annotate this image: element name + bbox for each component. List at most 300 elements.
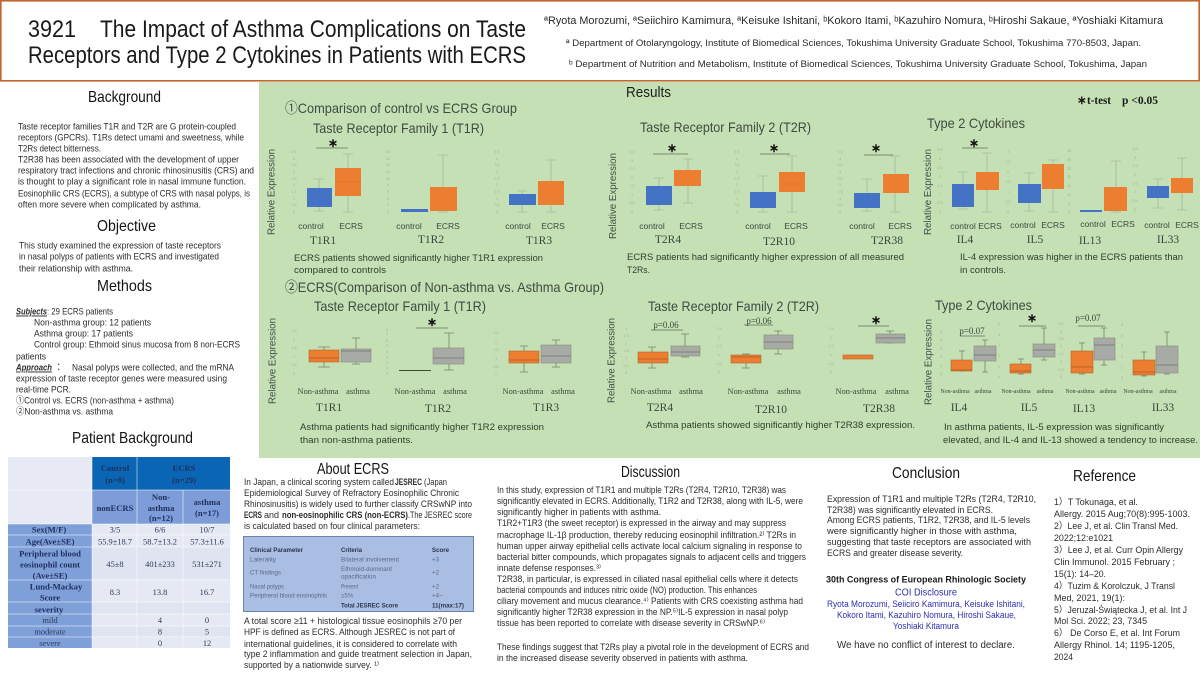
chart: T1R1 control vs ECRS: ∗ (328, 136, 338, 150)
table: JESREC score (244, 536, 474, 612)
text: reference list (1054, 496, 1190, 662)
chart: T1R2 non-asthma vs asthma: 5 (386, 344, 388, 348)
table: patient characteristics: 12 (203, 639, 211, 648)
panel: conclusion (826, 465, 1036, 651)
axis label: Relative Expression (606, 318, 618, 403)
chart: T1R3 control vs ECRS: 2.5 (494, 177, 500, 181)
table: patient characteristics: asthma (148, 503, 175, 513)
chart: IL33 non-asthma vs asthma (1121, 323, 1178, 414)
text: COI disclosure: Yoshiaki Kitamura (893, 621, 959, 631)
chart: T1R1 control vs ECRS: 1.5 (291, 190, 297, 194)
table: patient characteristics: Non- (152, 492, 170, 502)
panel: patient background (8, 430, 230, 648)
text: methods body (15, 306, 240, 416)
chart: T1R3 non-asthma vs asthma: 0 (495, 374, 497, 378)
text: ECRS definition: international guidelines, it is considered to correlate with (244, 638, 457, 649)
chart: IL4 non-asthma vs asthma: 2 (940, 355, 942, 359)
text: methods body: Approach (15, 362, 52, 372)
text: reference list: Med, 2021, 19(1): (1054, 592, 1125, 603)
heading: type 2 cytokines: Type 2 Cytokines (927, 115, 1025, 131)
chart: T2R10 control vs ECRS: 0 (736, 210, 738, 214)
chart: T2R38 non-asthma vs asthma: Non-asthma (836, 387, 877, 396)
chart: IL13 control vs ECRS: 5 (1068, 202, 1070, 206)
chart: IL13 non-asthma vs asthma: p=0.07 (1075, 313, 1101, 323)
table: patient characteristics: (n=29) (172, 475, 196, 485)
table: patient characteristics: 55.9±18.7 (98, 538, 132, 546)
chart: IL33 control vs ECRS: 3.5 (1132, 147, 1138, 151)
chart: IL4 control vs ECRS: ECRS (978, 221, 1002, 231)
table: patient characteristics: 10/7 (200, 526, 214, 534)
text: reference list: 2022;12:e1021 (1054, 532, 1113, 543)
table: patient characteristics: (n=17) (195, 508, 219, 518)
chart: T2R4 control vs ECRS: 0.5 (629, 201, 635, 205)
chart: T1R2 non-asthma vs asthma (386, 315, 467, 415)
chart: T2R38 control vs ECRS: 3 (839, 170, 841, 174)
chart: T1R2 non-asthma vs asthma: 1 (386, 366, 388, 370)
chart: IL5 control vs ECRS: control (1010, 220, 1036, 230)
table: patient characteristics: 0 (205, 616, 209, 625)
chart: T1R3 control vs ECRS: 1.5 (494, 190, 500, 194)
chart: T1R3 control vs ECRS: ECRS (541, 221, 565, 231)
chart: T1R1 non-asthma vs asthma (291, 329, 371, 414)
table: patient characteristics: 8.3 (110, 588, 120, 597)
chart: IL5 non-asthma vs asthma (998, 311, 1055, 414)
text: conclusion body: suggesting that taste receptors are associated with (827, 536, 1031, 547)
table: patient characteristics: mild (42, 616, 58, 625)
text: reference list: 15(1): 14–20. (1054, 568, 1106, 579)
chart: T1R2 control vs ECRS: 10 (386, 177, 390, 181)
table: JESREC score: +2 (432, 584, 440, 590)
chart: T2R10 non-asthma vs asthma: asthma (777, 387, 801, 396)
chart: IL13 control vs ECRS: 20 (1067, 175, 1071, 179)
panel: discussion (497, 464, 809, 663)
chart: T1R2 non-asthma vs asthma: T1R2 (425, 403, 451, 415)
title: 3921 (28, 16, 76, 43)
chart: T1R1 control vs ECRS: 3.5 (291, 163, 297, 167)
text: discussion body: T2R38, in particular, is expressed in ciliated nasal epithelial cells where it detects (497, 573, 798, 584)
chart: IL13 control vs ECRS: 25 (1067, 167, 1071, 171)
text: discussion body (497, 484, 809, 663)
caption: cytokines asthma: elevated, and IL-4 and IL-13 showed a tendency to increase. (943, 435, 1198, 446)
panel: references (1054, 468, 1190, 662)
table: JESREC score: Score (432, 547, 449, 554)
text: JESREC introduction: In Japan, a clinical scoring system called (244, 476, 394, 487)
chart: T1R2 control vs ECRS: T1R2 (418, 234, 444, 246)
chart: IL5 control vs ECRS: 1.5 (1005, 180, 1011, 184)
chart: T2R38 control vs ECRS: 4 (839, 157, 841, 161)
table: patient characteristics: Peripheral blood (19, 548, 81, 558)
table: patient characteristics: (Ave±SE) (33, 570, 67, 580)
chart: T2R4 control vs ECRS: T2R4 (655, 234, 681, 246)
chart: IL5 non-asthma vs asthma: 2 (998, 354, 1000, 358)
chart: IL5 control vs ECRS (1005, 150, 1065, 246)
table: JESREC score: +4~ (432, 592, 443, 600)
text: methods body: real-time PCR. (16, 384, 71, 394)
chart: T1R2 non-asthma vs asthma: asthma (443, 387, 467, 396)
chart: T1R1 non-asthma vs asthma: asthma (346, 387, 370, 396)
text: JESREC introduction: JESREC (395, 476, 422, 487)
chart: IL33 control vs ECRS: IL33 (1157, 234, 1179, 246)
text: discussion body: tissue has been reported to correlate with disease severity in CRSwNP.⁶⁾ (497, 617, 765, 628)
chart: T1R3 control vs ECRS: 2 (496, 183, 498, 187)
table: patient characteristics: 4 (158, 616, 163, 625)
chart: T2R38 non-asthma vs asthma: 0 (830, 370, 832, 374)
chart: T2R38 control vs ECRS: T2R38 (871, 235, 903, 247)
chart: IL13 non-asthma vs asthma: IL13 (1073, 403, 1095, 415)
chart: T2R4 control vs ECRS: ECRS (679, 221, 703, 231)
text: JESREC introduction: Rhinosinusitis) is widely used to further classify CRSwNP into (244, 498, 472, 509)
chart: T2R38 control vs ECRS: ECRS (888, 221, 912, 231)
chart: IL4 non-asthma vs asthma: p=0.07 (959, 326, 985, 336)
table: patient characteristics: 8 (158, 628, 162, 636)
chart: T2R38 control vs ECRS: 1.5 (837, 190, 843, 194)
chart: T2R10 control vs ECRS: 2 (736, 183, 738, 187)
chart: IL4 non-asthma vs asthma: 0 (940, 372, 942, 376)
chart: T2R10 control vs ECRS (734, 141, 808, 248)
table: patient characteristics: Control (101, 463, 130, 473)
chart: IL13 control vs ECRS (1067, 149, 1135, 247)
chart: T1R3 non-asthma vs asthma: 1 (495, 357, 497, 361)
chart: T2R10 control vs ECRS: 3.5 (734, 163, 740, 167)
chart: T2R38 non-asthma vs asthma: 0.5 (828, 362, 834, 366)
caption: cytokine comparison (960, 252, 1183, 276)
heading: methods: Methods (97, 278, 152, 295)
chart: IL5 non-asthma vs asthma: 0 (998, 375, 1000, 379)
heading: background: Background (88, 89, 161, 106)
chart: IL5 control vs ECRS: IL5 (1027, 234, 1044, 246)
table: patient characteristics: 57.3±11.6 (190, 538, 224, 546)
chart: T2R10 control vs ECRS: control (745, 221, 771, 231)
caption: T1R comparison: ECRS patients showed significantly higher T1R1 expression (294, 253, 543, 264)
chart: T1R2 control vs ECRS: 8 (387, 183, 389, 187)
chart: IL4 control vs ECRS: 1 (939, 192, 941, 196)
chart: IL13 control vs ECRS: ECRS (1111, 219, 1135, 229)
chart: T2R10 control vs ECRS: 1 (736, 197, 738, 201)
chart: T2R38 non-asthma vs asthma: 2.5 (828, 327, 834, 331)
chart: T2R10 control vs ECRS: 4.5 (734, 150, 740, 154)
legend: t-test significance: t-test (1087, 95, 1111, 107)
table: patient characteristics: Score (40, 592, 60, 602)
table: JESREC score: Laterality (250, 556, 277, 564)
chart: IL13 non-asthma vs asthma: 2.5 (1058, 337, 1064, 341)
chart: IL33 control vs ECRS (1132, 147, 1199, 246)
text: objective body (19, 240, 221, 274)
chart: T2R4 control vs ECRS: ∗ (667, 141, 677, 155)
text: discussion body: significantly elevated in ECRS. Additionally, T1R2 and T2R38, along with IL-5, were (497, 495, 803, 506)
chart: T1R1 non-asthma vs asthma: Non-asthma (298, 387, 339, 396)
table: patient characteristics: 531±271 (192, 560, 222, 569)
table: patient characteristics: severe (39, 639, 61, 648)
chart: T2R10 control vs ECRS: ECRS (784, 221, 808, 231)
caption: T1R comparison: compared to controls (294, 265, 386, 276)
heading: comparison 2: ②ECRS(Comparison of Non-asthma vs. Asthma Group) (285, 279, 604, 295)
chart: T1R3 non-asthma vs asthma: 2 (495, 340, 497, 344)
chart: T2R10 non-asthma vs asthma: 1 (718, 353, 720, 357)
text: COI disclosure (827, 588, 1025, 631)
title: Receptors and Type 2 Cytokines in Patients with ECRS (28, 42, 526, 69)
axis label: Relative Expression (266, 318, 278, 404)
chart: IL4 control vs ECRS (937, 136, 1002, 246)
table: patient characteristics: 6/6 (155, 526, 165, 534)
text: ECRS definition: type 2 inflammation and guide treatment selection in Japan, (244, 648, 472, 659)
chart: IL13 non-asthma vs asthma: 2 (1060, 345, 1062, 349)
chart: T1R1 non-asthma vs asthma: 1 (293, 355, 295, 359)
table: JESREC score: Clinical Parameter (250, 547, 303, 554)
text: JESREC introduction: and (264, 509, 279, 520)
chart: IL4 control vs ECRS: 1.5 (937, 184, 943, 188)
caption: cytokines asthma (943, 422, 1198, 446)
axis label: Relative Expression (922, 149, 934, 235)
chart: T2R38 non-asthma vs asthma: 2 (830, 336, 832, 340)
text: JESREC introduction: is calculated based on four clinical parameters: (244, 520, 420, 531)
chart: T1R1 non-asthma vs asthma: 2.5 (291, 329, 297, 333)
chart: T1R1 control vs ECRS: T1R1 (310, 235, 336, 247)
chart: IL4 control vs ECRS: 0 (939, 210, 941, 214)
table: patient characteristics: Sex(M/F) (32, 524, 66, 534)
chart: T1R2 control vs ECRS: 0 (387, 210, 389, 214)
chart: T1R3 non-asthma vs asthma: 2.5 (493, 331, 499, 335)
caption: T2R asthma: Asthma patients showed significantly higher T2R38 expression. (646, 420, 915, 431)
chart: T1R1 control vs ECRS: 0.5 (291, 203, 297, 207)
chart: T2R10 control vs ECRS: 1.5 (734, 190, 740, 194)
chart: T1R2 non-asthma vs asthma: 4 (386, 350, 388, 354)
table: patient characteristics: 13.8 (153, 588, 167, 597)
text: ECRS definition (244, 615, 472, 670)
text: reference list: 2024 (1054, 651, 1073, 662)
heading: discussion: Discussion (621, 464, 680, 481)
text: no conflict statement: We have no conflict of interest to declare. (837, 640, 1015, 651)
text: COI disclosure: Kokoro Itami, Kazuhiro Nomura, Hiroshi Sakaue, (837, 610, 1016, 620)
chart: T1R3 control vs ECRS: control (505, 221, 531, 231)
chart: T1R2 non-asthma vs asthma: 7 (386, 333, 388, 337)
text: discussion body: bacterial compounds and induces nitric oxide (NO) production. This enhances (497, 584, 757, 595)
text: background body: receptors (GPCRs). T1Rs detect umami and sweetness, while (18, 132, 244, 142)
chart: IL5 non-asthma vs asthma: 3 (998, 343, 1000, 347)
chart: T2R4 non-asthma vs asthma: 2.5 (623, 334, 629, 338)
table: JESREC score: +3 (432, 556, 440, 564)
text: discussion body: significantly higher T2R38 expression in the NP.⁵⁾IL-5 expression in nasal polyp (497, 606, 788, 617)
chart: T1R1 non-asthma vs asthma: 2 (293, 338, 295, 342)
chart: IL4 non-asthma vs asthma: asthma (974, 389, 992, 395)
chart: T1R2 control vs ECRS: 12 (386, 170, 390, 174)
chart: T1R3 non-asthma vs asthma: T1R3 (533, 402, 559, 414)
text: discussion body: bacterial bitter compounds, which propagates signals to adjacent cells and triggers (497, 551, 806, 562)
chart: IL4 control vs ECRS: 2.5 (937, 166, 943, 170)
heading: T1R family, asthma: Taste Receptor Family 1 (T1R) (314, 298, 486, 314)
table: patient characteristics: Age(Ave±SE) (26, 536, 75, 546)
chart: IL13 control vs ECRS: 15 (1067, 184, 1071, 188)
heading: objective: Objective (97, 218, 156, 235)
chart: T1R1 non-asthma vs asthma: 0 (293, 372, 295, 376)
table: JESREC score: Criteria (341, 547, 362, 554)
chart: IL13 non-asthma vs asthma: 1 (1060, 360, 1062, 364)
chart: T2R10 non-asthma vs asthma: 0 (718, 370, 720, 374)
chart: T1R1 control vs ECRS: 4.5 (291, 150, 297, 154)
chart: T1R3 control vs ECRS: T1R3 (526, 235, 552, 247)
chart: T2R38 control vs ECRS: 3.5 (837, 163, 843, 167)
table: patient characteristics: 401±233 (145, 560, 175, 569)
legend: t-test significance (1077, 95, 1158, 107)
text: discussion body: in the increased disease severity observed in patients with asthma. (497, 652, 748, 663)
caption: T1R comparison (294, 253, 543, 276)
caption: T1R asthma (300, 422, 544, 446)
chart: T2R38 control vs ECRS: 4.5 (837, 150, 843, 154)
text: reference list: Allergy Rhinol. 14; 1195-1205, (1054, 639, 1175, 650)
chart: IL33 control vs ECRS: 3 (1134, 156, 1136, 160)
caption: T2R comparison: T2Rs. (627, 265, 650, 276)
text: reference list: 1）T Tokunaga, et al. (1054, 496, 1138, 507)
heading: conclusion: Conclusion (892, 465, 960, 482)
panel: methods (15, 278, 240, 416)
heading: comparison 1: ①Comparison of control vs ECRS Group (285, 100, 517, 116)
table: JESREC score: Nasal polyps (250, 584, 284, 590)
text: discussion body: human upper airway epithelial cells activate local calcium signaling in response to (497, 540, 802, 551)
panel: about ECRS (244, 461, 474, 670)
chart: T1R3 control vs ECRS: 0 (496, 210, 498, 214)
authors and affiliations: ª Department of Otolaryngology, Institute of Biomedical Sciences, Tokushima University Graduate School, Tokushima 770-8503, Japan. (566, 38, 1141, 49)
chart: T2R10 control vs ECRS: 4 (736, 157, 738, 161)
table: patient characteristics (8, 457, 230, 648)
table: patient characteristics: 58.7±13.2 (143, 538, 177, 546)
chart: T2R10 non-asthma vs asthma: T2R10 (755, 404, 787, 416)
heading: T1R family: Taste Receptor Family 1 (T1R) (313, 120, 484, 136)
text: JESREC introduction: Epidemiological Survey of Refractory Eosinophilic Chronic (244, 487, 459, 498)
chart: IL33 control vs ECRS: 2 (1134, 173, 1136, 177)
text: methods body: patients (16, 350, 46, 362)
chart: IL13 control vs ECRS: 30 (1067, 158, 1071, 162)
chart: T1R3 control vs ECRS: 1 (496, 197, 498, 201)
text: discussion body: These findings suggest that T2Rs play a pivotal role in the development of ECRS and (497, 641, 809, 652)
chart: T2R4 non-asthma vs asthma: 0 (625, 371, 627, 375)
chart: T2R10 non-asthma vs asthma: 0.5 (716, 362, 722, 366)
text: methods body: Subjects (16, 306, 47, 316)
axis label: Relative Expression (922, 319, 934, 405)
heading: patient background: Patient Background (72, 430, 193, 447)
chart: T2R38 control vs ECRS (837, 141, 912, 247)
chart: IL13 non-asthma vs asthma (1058, 313, 1117, 415)
heading: reference: Reference (1073, 468, 1136, 485)
chart: T1R2 non-asthma vs asthma: ∗ (427, 315, 437, 329)
chart: T2R4 non-asthma vs asthma: p=0.06 (653, 320, 679, 330)
text: reference list: 6） De Corso E, et al. Int Forum (1054, 627, 1180, 638)
text: ECRS definition: HPF is defined as ECRS. Although JESREC is not part of (244, 626, 455, 637)
chart: T1R2 control vs ECRS: control (396, 221, 422, 231)
chart: T2R38 non-asthma vs asthma: ∗ (871, 313, 881, 327)
chart: T1R1 control vs ECRS: 2 (293, 183, 295, 187)
text: objective body: in nasal polyps of patients with ECRS and investigated (19, 250, 219, 262)
chart: T1R2 non-asthma vs asthma: 6 (386, 339, 388, 343)
text: background body: often more severe when complicated by asthma. (18, 198, 201, 210)
table: patient characteristics: (n=12) (149, 513, 173, 523)
title: The Impact of Asthma Complications on Taste (100, 16, 526, 43)
chart: IL33 control vs ECRS: 0.5 (1132, 199, 1138, 203)
chart: IL4 control vs ECRS: IL4 (957, 234, 974, 246)
text: objective body: This study examined the expression of taste receptors (19, 240, 221, 250)
authors and affiliations: ᵇ Department of Nutrition and Metabolism, Institute of Biomedical Sciences, Tokushima University Graduate School, Tokushima, Japan (569, 59, 1147, 70)
chart: T1R3 control vs ECRS: 4.5 (494, 150, 500, 154)
chart: IL5 control vs ECRS: 0 (1007, 210, 1009, 214)
text: JESREC introduction (244, 476, 472, 531)
text: methods body: ①Control vs. ECRS (non-asthma + asthma) (16, 394, 174, 406)
chart: T2R38 control vs ECRS: 0 (839, 210, 841, 214)
chart: T1R3 non-asthma vs asthma (493, 331, 575, 414)
chart: IL13 control vs ECRS: 35 (1067, 149, 1071, 153)
table: patient characteristics: 16.7 (200, 588, 214, 597)
text: methods body: Nasal polyps were collected, and the mRNA (72, 362, 235, 372)
table: JESREC score: 11(max:17) (432, 602, 464, 610)
chart: T2R10 control vs ECRS: T2R10 (763, 236, 795, 248)
panel: background (18, 89, 254, 210)
chart: T1R2 control vs ECRS: 16 (386, 157, 390, 161)
table: JESREC score: CT findings (250, 570, 281, 576)
chart: IL33 non-asthma vs asthma: 2 (1121, 355, 1123, 359)
table: patient characteristics: Lund-Mackay (30, 582, 83, 592)
text: ECRS definition: supported by a nationwide survey. ¹⁾ (244, 659, 379, 670)
chart: T2R38 non-asthma vs asthma: 1 (830, 353, 832, 357)
chart: IL4 non-asthma vs asthma (940, 326, 996, 414)
chart: IL4 control vs ECRS: 0.5 (937, 201, 943, 205)
table: JESREC score: +2 (432, 570, 440, 576)
text: congress name: 30th Congress of European Rhinologic Society (826, 574, 1027, 586)
chart: IL4 control vs ECRS: control (950, 221, 976, 231)
chart: T1R2 control vs ECRS: 6 (387, 190, 389, 194)
text: background body: T2R38 has been associated with the development of upper (18, 154, 239, 164)
chart: T1R1 non-asthma vs asthma: 0.5 (291, 363, 297, 367)
chart: T2R4 control vs ECRS: 2.5 (629, 167, 635, 171)
table: patient characteristics: severity (35, 604, 64, 614)
chart: T2R38 control vs ECRS: 2.5 (837, 177, 843, 181)
table: JESREC score: Ethmoid-dominant (341, 566, 392, 573)
chart: T2R38 control vs ECRS: ∗ (871, 141, 881, 155)
text: background body: respiratory tract infections and chronic rhinosinusitis (CRS) and (18, 164, 254, 176)
text: JESREC introduction: (Japan (424, 476, 447, 487)
chart: IL33 non-asthma vs asthma: IL33 (1152, 402, 1174, 414)
chart: IL33 control vs ECRS: 0 (1134, 208, 1136, 212)
chart: T1R2 control vs ECRS: 2 (387, 203, 389, 207)
chart: T2R4 non-asthma vs asthma: 1.5 (623, 349, 629, 353)
chart: T2R38 control vs ECRS: 1 (839, 197, 841, 201)
chart: IL13 control vs ECRS: IL13 (1079, 235, 1101, 247)
chart: IL5 non-asthma vs asthma: Non-asthma (1001, 389, 1031, 395)
text: methods body: ②Non-asthma vs. asthma (16, 406, 114, 416)
text: methods body: expression of taste receptor genes were measured using (16, 372, 227, 384)
chart: T2R4 non-asthma vs asthma: Non-asthma (631, 387, 672, 396)
chart: T2R10 control vs ECRS: 0.5 (734, 203, 740, 207)
text: background body: Taste receptor families T1R and T2R are G protein-coupled (18, 120, 236, 132)
chart: T1R2 non-asthma vs asthma: 0 (386, 372, 388, 376)
chart: T2R10 control vs ECRS: 2.5 (734, 177, 740, 181)
chart: T2R10 non-asthma vs asthma: 2.5 (716, 327, 722, 331)
chart: IL33 non-asthma vs asthma: asthma (1160, 389, 1177, 395)
table: patient characteristics: (n=8) (105, 475, 125, 485)
chart: T2R38 non-asthma vs asthma (828, 313, 909, 415)
chart: IL13 non-asthma vs asthma: 0 (1060, 375, 1062, 379)
chart: IL5 non-asthma vs asthma: 5 (998, 322, 1000, 326)
chart: T1R1 non-asthma vs asthma: T1R1 (316, 402, 342, 414)
chart: T2R10 non-asthma vs asthma: 1.5 (716, 344, 722, 348)
table: JESREC score: opacification (341, 574, 377, 580)
table: patient characteristics: 3/5 (110, 526, 120, 534)
chart: T1R3 non-asthma vs asthma: 0.5 (493, 365, 499, 369)
table: patient characteristics: moderate (34, 628, 66, 636)
caption: T1R asthma: than non-asthma patients. (300, 435, 413, 446)
chart: IL4 non-asthma vs asthma: Non-asthma (940, 389, 970, 395)
chart: IL4 control vs ECRS: ∗ (969, 136, 979, 150)
chart: T2R4 control vs ECRS: control (639, 221, 665, 231)
chart: T2R4 control vs ECRS: 3 (631, 159, 633, 163)
text: methods body: Asthma group: 17 patients (34, 328, 133, 338)
text: objective body: their relationship with asthma. (19, 262, 133, 274)
